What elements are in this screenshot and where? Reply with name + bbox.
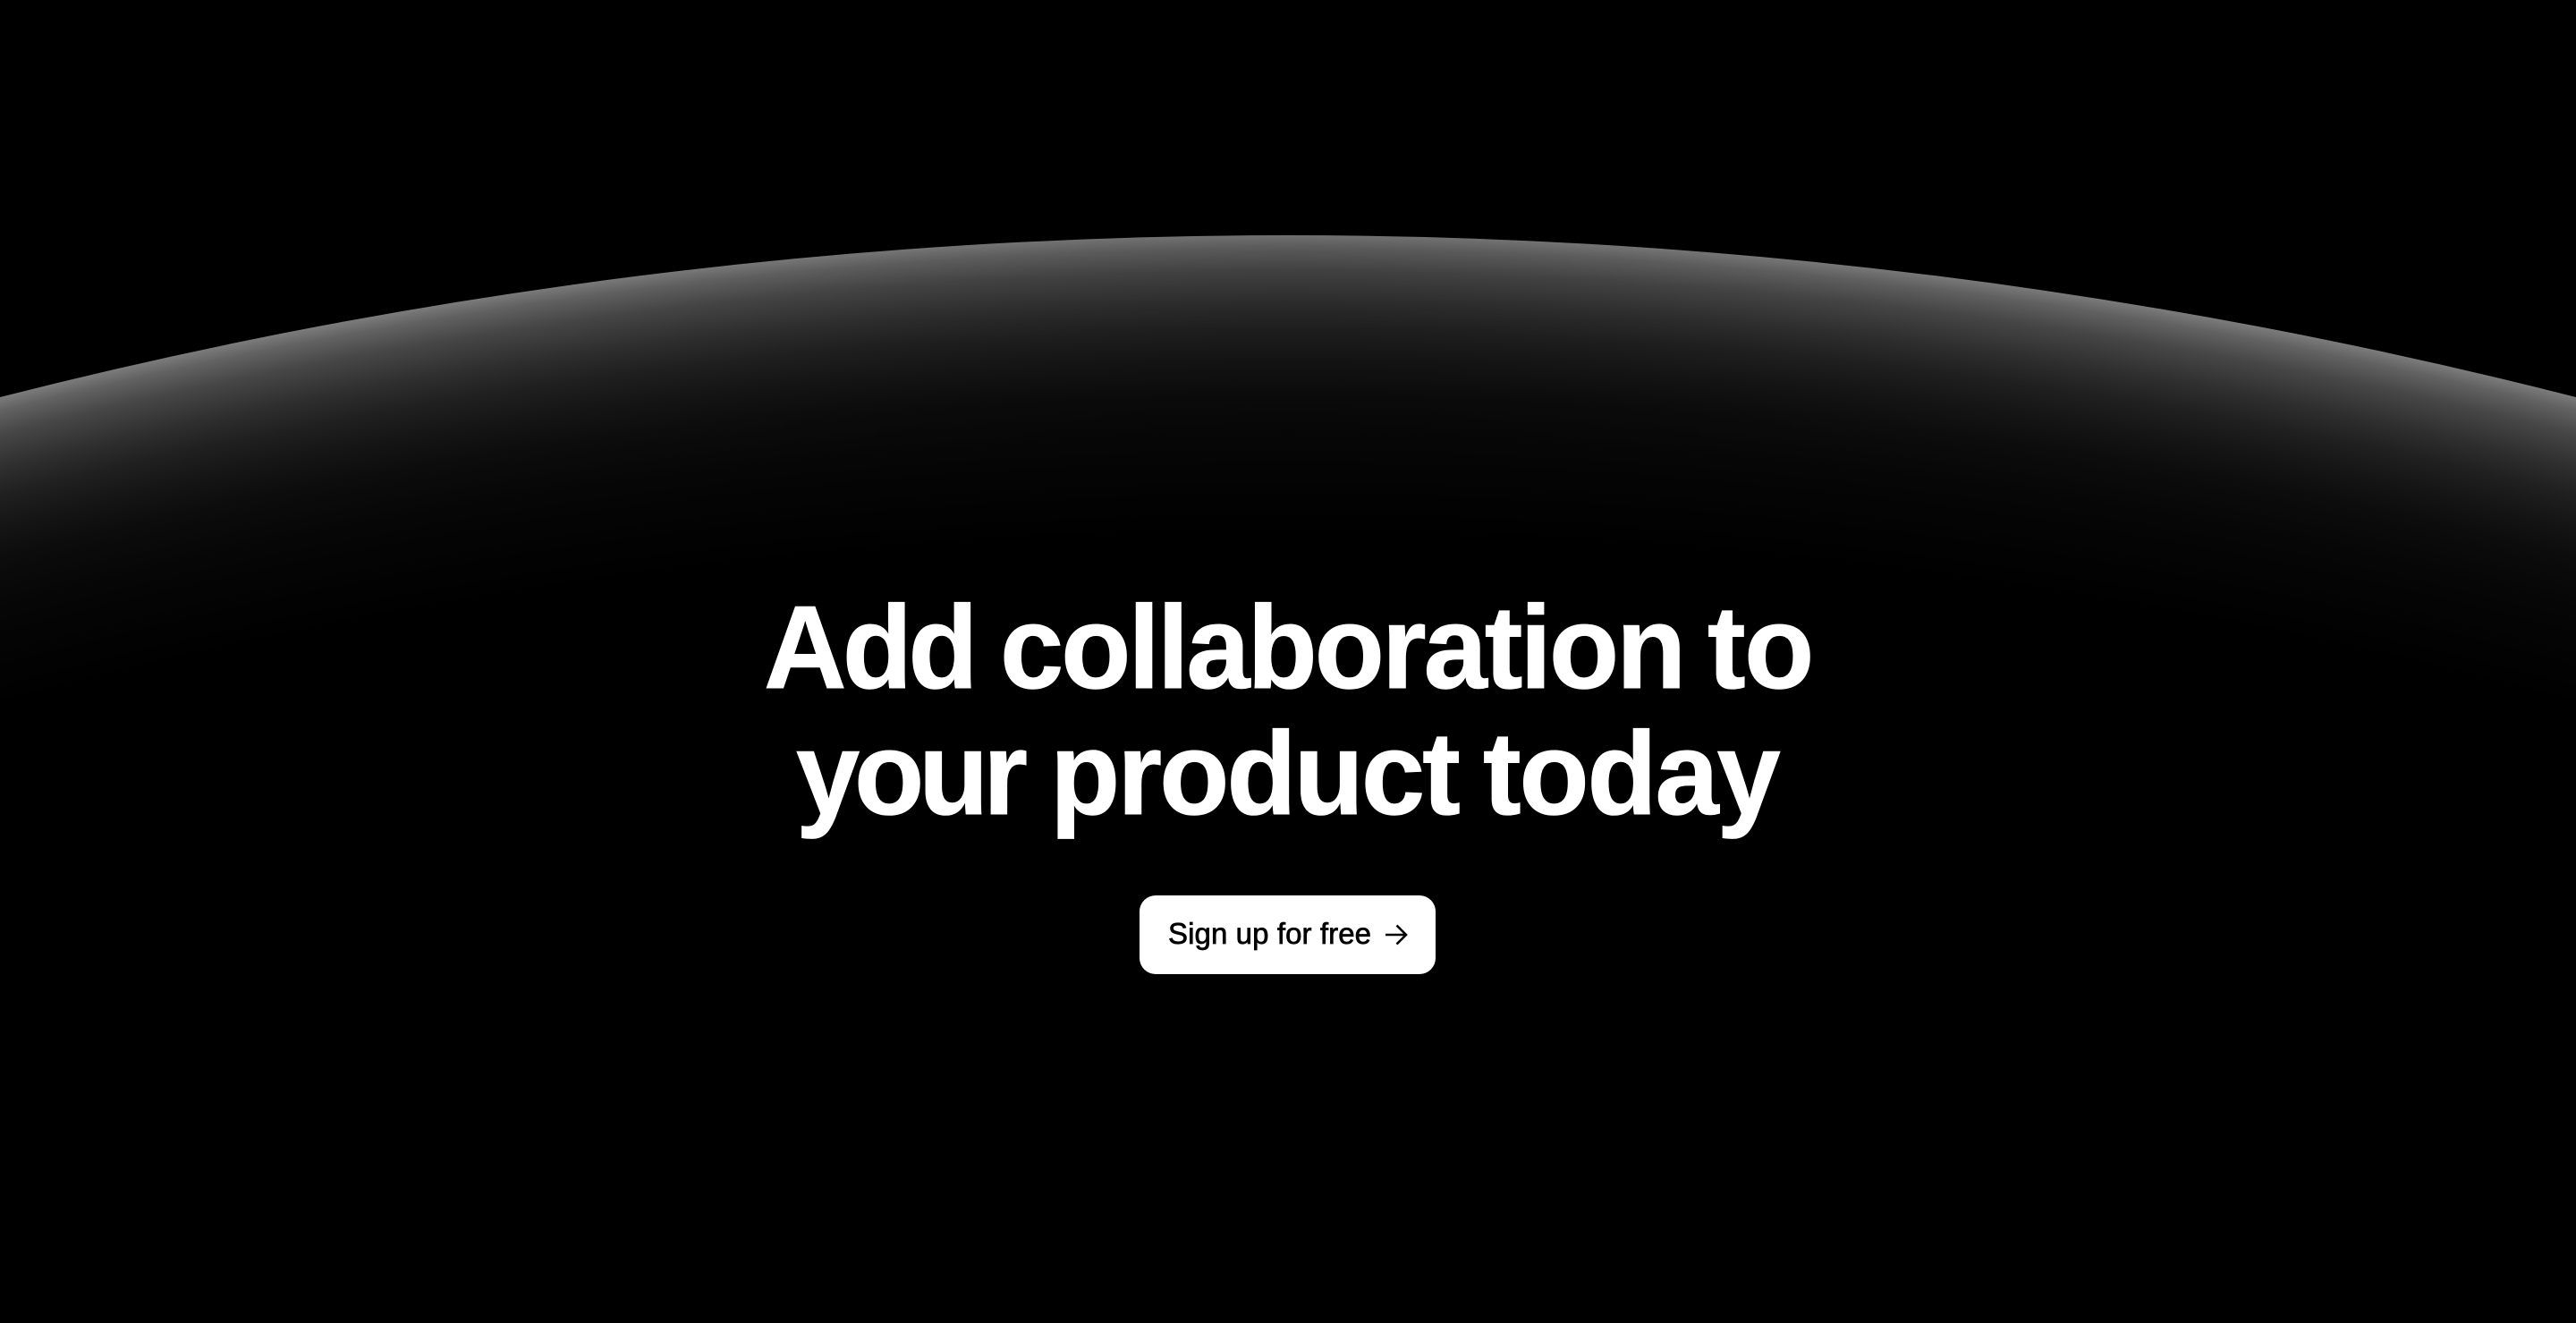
heading: today <box>1483 707 1781 839</box>
heading: Add <box>764 581 979 713</box>
heading: your <box>796 707 1028 839</box>
heading: to <box>1707 581 1814 713</box>
sign up button: Sign up for free <box>1168 917 1371 950</box>
heading: collaboration <box>1000 581 1686 713</box>
sign up button <box>1140 895 1436 974</box>
heading <box>764 581 1814 839</box>
heading: product <box>1050 707 1461 839</box>
icon: arrow <box>1385 925 1406 945</box>
